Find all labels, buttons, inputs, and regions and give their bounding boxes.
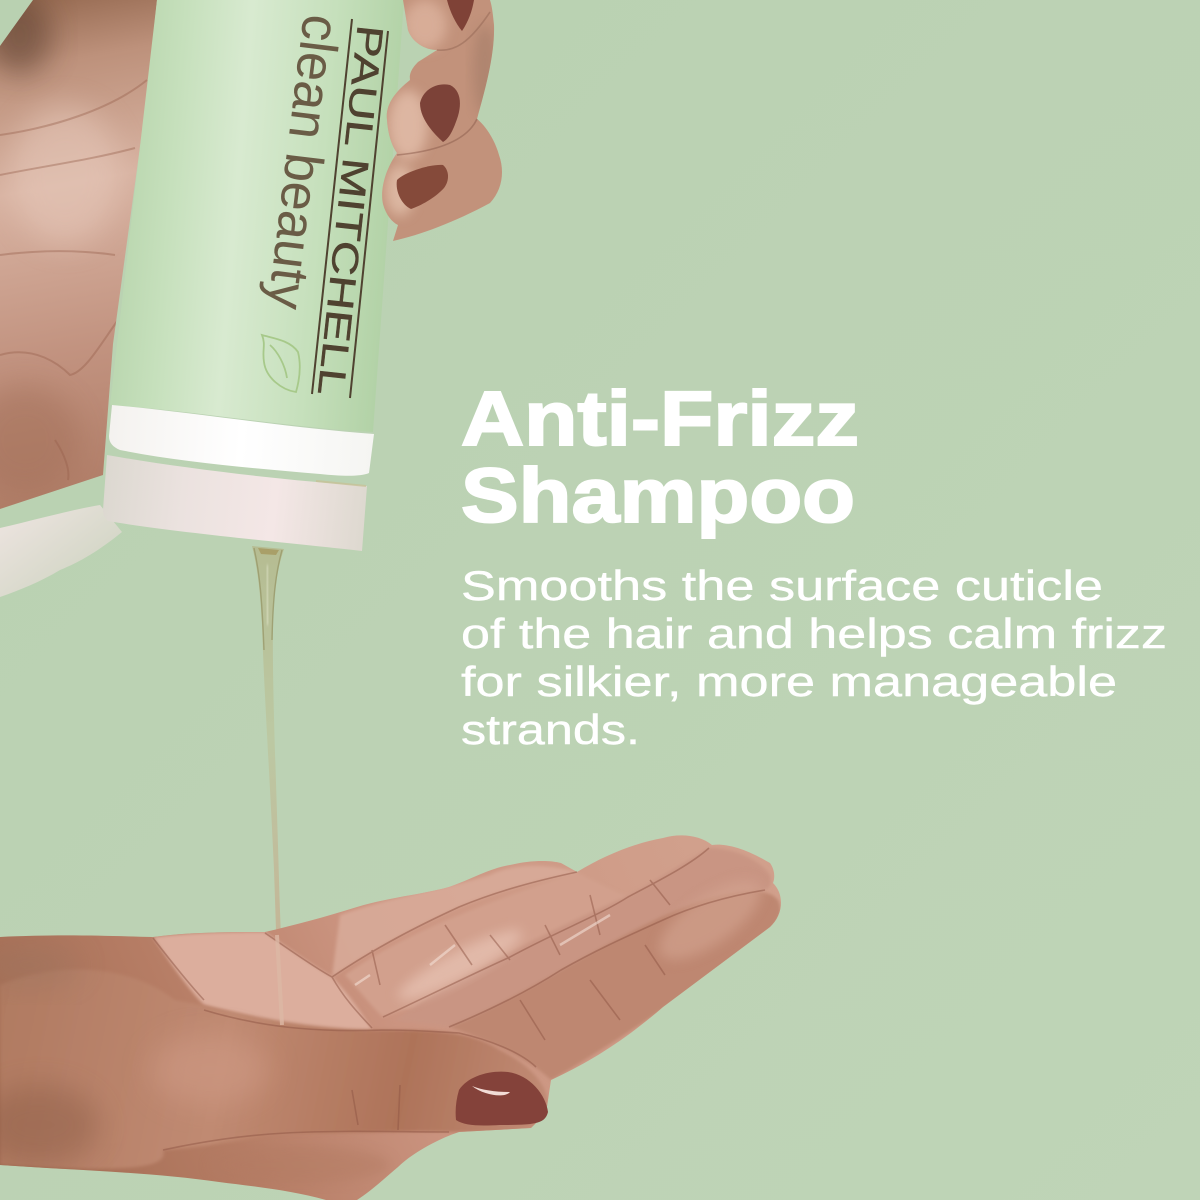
brand name: PAUL MITCHELL — [310, 23, 391, 397]
bottle label body — [110, 0, 404, 432]
upper hand holding the bottle — [0, 0, 157, 509]
nail: middle finger — [420, 84, 460, 142]
body description: strands. — [461, 706, 640, 753]
translucent pump cap — [103, 455, 367, 551]
flip cap lid — [0, 505, 122, 597]
icon: leaf — [262, 335, 300, 392]
drip of shampoo — [252, 546, 284, 1027]
shampoo bottle — [103, 0, 404, 551]
heading — [461, 376, 859, 539]
palm — [153, 932, 372, 1031]
heading: Anti-Frizz — [461, 376, 859, 462]
heading: Shampoo — [461, 453, 855, 539]
body description: for silkier, more manageable — [461, 658, 1117, 705]
body description: Smooths the surface cuticle — [461, 562, 1103, 609]
thumb and heel — [0, 969, 548, 1169]
nail: thumb — [456, 1072, 548, 1125]
upper fingers gripping the bottle — [382, 0, 502, 241]
wet highlights — [355, 915, 610, 985]
nail: top finger — [447, 0, 474, 31]
lower open hand — [0, 835, 781, 1200]
nail: lower finger — [397, 165, 448, 209]
brand name — [310, 19, 391, 398]
hand creases — [153, 848, 765, 1150]
body description — [461, 562, 1167, 753]
shampoo strand over the palm — [277, 935, 282, 1025]
body description: of the hair and helps calm frizz — [461, 610, 1167, 657]
bottle white collar — [109, 405, 374, 476]
product line name: clean beauty — [256, 12, 351, 313]
finger shading — [332, 848, 780, 1080]
